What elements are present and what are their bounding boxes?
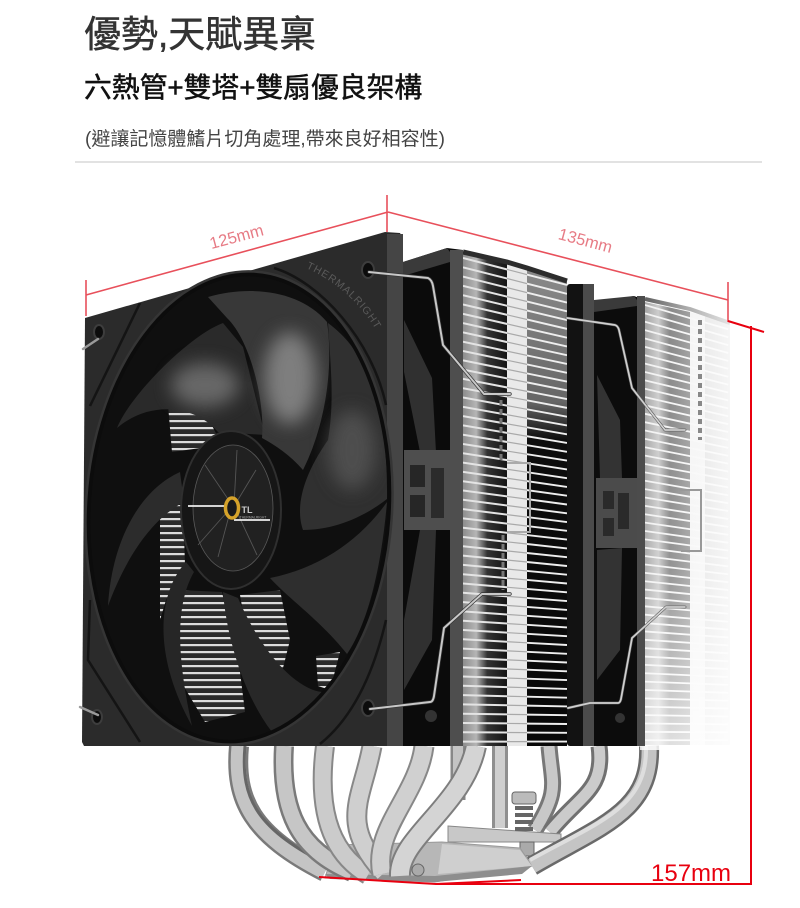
cooler illustration with dimensions xyxy=(78,195,764,885)
fan hub xyxy=(181,431,281,589)
header divider xyxy=(75,161,762,163)
dimension: 135mm xyxy=(388,212,728,322)
screw holes xyxy=(92,262,374,724)
note text: (避讓記憶體鰭片切角處理,帶來良好相容性) xyxy=(85,129,445,150)
hub gold center xyxy=(226,498,238,518)
fan brand mark: THERMALRIGHT xyxy=(308,262,382,326)
blade: bottom xyxy=(223,592,322,732)
bracket clip xyxy=(507,463,530,532)
front fan side vents xyxy=(403,248,463,746)
dimension: 125mm xyxy=(86,195,388,316)
fin peek left xyxy=(160,505,185,620)
heat pipes and base xyxy=(238,746,649,882)
fin peek right xyxy=(316,652,340,690)
rear pipes xyxy=(458,746,600,832)
front pipes xyxy=(238,746,649,876)
title: 優勢,天賦異稟 xyxy=(84,14,316,55)
dimension: 125mm: 125mm xyxy=(208,221,266,253)
blade: upper left xyxy=(117,323,265,435)
blade: lower left xyxy=(163,562,194,726)
dimension: 157mm: 157mm xyxy=(651,860,731,887)
hub brand: THERMALRIGHT xyxy=(240,516,266,520)
blade: left xyxy=(108,472,184,606)
heatpipe stub xyxy=(698,320,702,440)
front heatsink tower xyxy=(463,252,567,746)
base block xyxy=(325,842,532,882)
rear heatsink tower xyxy=(640,290,740,750)
heatpipe stubs xyxy=(501,400,503,590)
fin peek top xyxy=(168,409,216,452)
front fan xyxy=(82,232,403,746)
blade: right xyxy=(300,323,387,530)
mounting bracket and screw xyxy=(448,792,561,856)
blade: top xyxy=(208,291,329,470)
rear fan side xyxy=(567,284,645,746)
blade: lower right xyxy=(270,502,387,654)
bracket clip xyxy=(679,490,701,551)
fan ring xyxy=(70,261,408,755)
hub white bars xyxy=(188,506,270,520)
dimension: 135mm: 135mm xyxy=(556,225,614,257)
fin peek bottom xyxy=(180,590,245,722)
fin peek center xyxy=(240,590,290,672)
rotor opening xyxy=(108,291,387,730)
fade overlay xyxy=(640,290,740,750)
vents xyxy=(597,375,622,680)
subtitle: 六熱管+雙塔+雙扇優良架構 xyxy=(84,72,422,103)
frame xyxy=(82,232,403,746)
hub logo: TL xyxy=(242,505,253,515)
wire clips xyxy=(80,272,685,715)
